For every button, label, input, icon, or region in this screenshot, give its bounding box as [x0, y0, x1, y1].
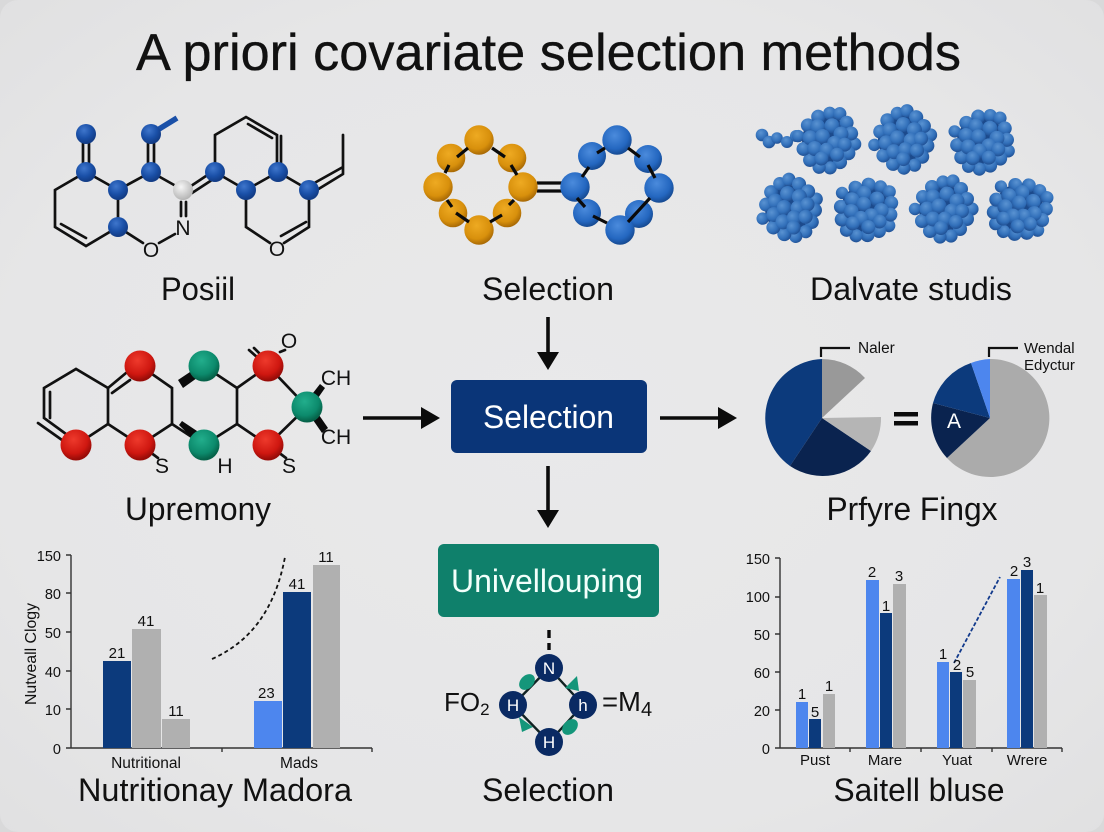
panel: Posiil molecule: O — [143, 239, 159, 262]
stem — [151, 118, 177, 134]
formula left: 2 — [480, 700, 490, 719]
y ticks: 10 — [45, 703, 61, 719]
atom labels: H — [217, 455, 233, 478]
green atoms — [188, 350, 322, 460]
box: Selection: Selection — [483, 399, 614, 435]
clusters — [745, 97, 1068, 258]
dashes — [547, 630, 551, 650]
right pie: Wendal — [1024, 340, 1075, 357]
y ticks: 50 — [45, 626, 61, 642]
values — [798, 554, 1044, 721]
green arrowheads — [516, 671, 581, 738]
formula right: 4 — [641, 699, 652, 721]
bonds — [38, 348, 307, 458]
y ticks: 20 — [754, 704, 770, 720]
axes — [66, 555, 372, 752]
node letters: N — [543, 659, 555, 678]
values: 2 — [953, 657, 961, 674]
box: Univelouping — [438, 544, 659, 617]
values: 1 — [939, 646, 947, 663]
node letters: h — [578, 696, 588, 715]
equals sign — [894, 412, 918, 426]
values: 11 — [318, 549, 334, 566]
y ticks — [37, 549, 61, 758]
bars — [796, 570, 1047, 748]
label: Posiil: Posiil — [161, 271, 235, 307]
bonds — [513, 668, 583, 742]
arrow: down to selection — [537, 317, 559, 370]
values: 1 — [1036, 580, 1044, 597]
label: Upremony: Upremony — [125, 491, 271, 527]
y ticks: 50 — [754, 628, 770, 644]
panel: Upremony molecule — [38, 330, 351, 478]
dashed curve — [212, 557, 285, 659]
x labels — [800, 752, 1047, 769]
x labels: Nutritional — [111, 755, 181, 772]
panel: Posiil molecule: N — [175, 217, 191, 240]
label: Saitell bluse: Saitell bluse — [834, 772, 1004, 808]
arrow: down to green box — [537, 466, 559, 528]
values: 23 — [258, 685, 275, 702]
panel: right bar chart — [746, 552, 1062, 769]
panel: Posiil molecule — [55, 117, 343, 262]
y ticks: 150 — [37, 549, 61, 565]
x labels: Mare — [868, 752, 902, 769]
x labels: Yuat — [942, 752, 973, 769]
values: 41 — [138, 613, 154, 630]
double bond — [537, 183, 563, 191]
node letters: H — [507, 696, 519, 715]
x labels: Pust — [800, 752, 831, 769]
arrow: right to pies — [660, 407, 737, 429]
label: Nutritionay Madora: Nutritionay Madora — [78, 772, 352, 808]
right pie — [931, 340, 1075, 477]
label: Prfyre Fingx: Prfyre Fingx — [826, 491, 998, 527]
y axis title: Nutveall Clogy — [23, 603, 40, 705]
values: 21 — [109, 645, 125, 662]
atom labels — [155, 330, 351, 478]
node letters — [507, 659, 588, 752]
label: Selection bottom: Selection — [482, 772, 614, 808]
atom labels: S — [282, 455, 296, 478]
wedges — [178, 370, 328, 439]
panel: bottom ring molecule — [444, 630, 652, 756]
bonds — [55, 117, 343, 246]
panel: left bar chart — [23, 549, 372, 772]
box: Univelouping: Univellouping — [451, 563, 643, 599]
tail atoms — [756, 129, 802, 148]
values: 3 — [895, 568, 903, 585]
label: Selection top: Selection — [482, 271, 614, 307]
right pie: Edyctur — [1024, 357, 1075, 374]
box: Selection — [451, 380, 647, 453]
y ticks: 150 — [746, 552, 770, 568]
panel: Posiil molecule: O — [269, 238, 285, 261]
values: 3 — [1023, 554, 1031, 571]
values: 5 — [966, 664, 974, 681]
y ticks: 0 — [762, 742, 770, 758]
panel: pie charts — [765, 340, 1075, 477]
atom labels: O — [281, 330, 297, 353]
y ticks: 40 — [45, 665, 61, 681]
x labels: Wrere — [1007, 752, 1047, 769]
formula right: =M — [602, 686, 641, 717]
values — [109, 549, 334, 720]
axes — [775, 558, 1062, 752]
atom labels: CH — [321, 426, 351, 449]
nodes — [499, 654, 597, 756]
panel: orange and blue rings — [423, 125, 674, 245]
dashed line — [954, 577, 1000, 663]
title: A priori covariate selection methods — [136, 24, 961, 82]
values: 2 — [1010, 563, 1018, 580]
blue atoms — [560, 125, 674, 245]
panel: Dalvate clusters — [745, 97, 1068, 258]
values: 2 — [868, 564, 876, 581]
right pie: A — [947, 410, 961, 433]
y ticks: 0 — [53, 742, 61, 758]
arrow: right to selection — [363, 407, 440, 429]
values: 41 — [289, 576, 305, 593]
short blue bonds — [577, 148, 655, 223]
values: 11 — [168, 703, 184, 720]
atoms — [76, 124, 319, 237]
formula left: FO — [444, 687, 480, 717]
values: 1 — [798, 686, 806, 703]
values: 1 — [882, 598, 890, 615]
x labels — [111, 755, 318, 772]
orange atoms — [423, 125, 538, 245]
atom labels: CH — [321, 367, 351, 390]
values: 5 — [811, 704, 819, 721]
y ticks: 60 — [754, 666, 770, 682]
label: Dalvate studis: Dalvate studis — [810, 271, 1012, 307]
bars — [103, 565, 340, 748]
x labels: Mads — [280, 755, 318, 772]
left pie: Naler — [858, 340, 895, 357]
red atoms — [60, 350, 284, 460]
y ticks: 80 — [45, 587, 61, 603]
node letters: H — [543, 733, 555, 752]
y ticks: 100 — [746, 590, 770, 606]
values: 1 — [825, 678, 833, 695]
y ticks — [746, 552, 770, 758]
left pie — [765, 340, 895, 476]
short orange bonds — [445, 148, 517, 222]
atom labels: S — [155, 455, 169, 478]
